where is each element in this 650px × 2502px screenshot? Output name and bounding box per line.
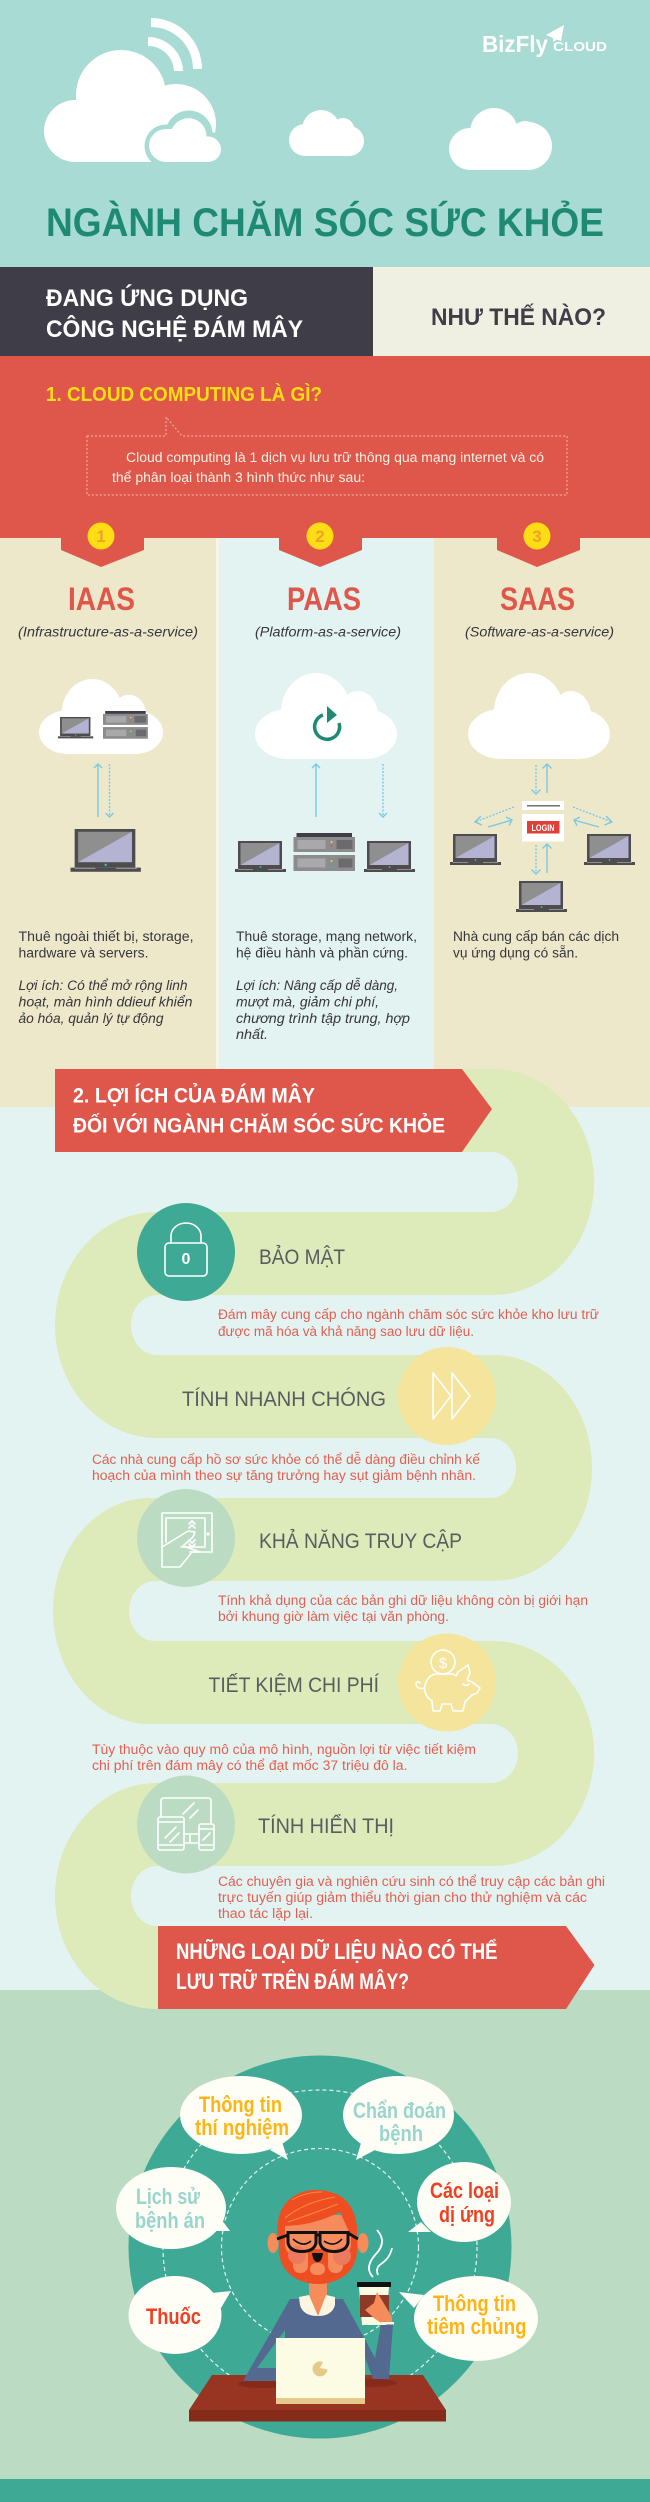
text: PAAS description: [236, 929, 417, 1042]
bubble: medical history: Lịch sử: [136, 2184, 200, 2209]
icon: laptop left: [235, 841, 286, 872]
text: cost saving description: Tùy thuộc vào quy mô của mô hình, nguồn lợi từ việc tiết kiệm: [92, 1742, 476, 1757]
bubble: lab information: [180, 2076, 302, 2160]
text: speed description: hoạch của mình theo sự tăng trưởng hay sụt giảm bệnh nhân.: [92, 1468, 476, 1483]
bubble: allergies: Các loại: [430, 2178, 499, 2203]
benefit: cost saving: [92, 1634, 496, 1773]
icon: piggy bank: $: [439, 1655, 448, 1672]
label: visibility: TÍNH HIỂN THỊ: [258, 1815, 394, 1838]
logo: BizFly Cloud: BizFly: [482, 31, 548, 57]
title: NGÀNH CHĂM SÓC SỨC KHỎE: [46, 199, 604, 245]
panel: PAAS: [235, 581, 417, 1042]
icon: hand on tablet: [137, 1489, 235, 1587]
text: speed description: Các nhà cung cấp hồ sơ sức khỏe có thể dễ dàng điều chỉnh kế: [92, 1452, 480, 1467]
text: PAAS description: Thuê storage, mạng network,: [236, 929, 417, 944]
text: IAAS description: hoạt, màn hình ddieuf khiển: [18, 994, 192, 1010]
large cloud with wifi signal: [44, 18, 230, 170]
text: accessibility description: bởi khung giờ làm việc tại văn phòng.: [218, 1609, 449, 1624]
icon: lock: [137, 1203, 235, 1301]
right cloud: [449, 108, 552, 170]
icon: laptop left: [450, 834, 501, 865]
bubble: diagnosis: [343, 2076, 454, 2160]
text: cost saving description: chi phí trên đám mây có thể đạt mốc 37 triệu đô la.: [92, 1758, 408, 1773]
subtitle band dark: CÔNG NGHỆ ĐÁM MÂY: [46, 315, 303, 343]
logo: BizFly Cloud: [482, 25, 607, 57]
text: cost saving description: [92, 1742, 476, 1773]
heading: section 1: 1. CLOUD COMPUTING LÀ GÌ?: [46, 383, 322, 406]
panel: benefits background: [0, 1107, 650, 2105]
benefit: accessibility: [137, 1489, 588, 1624]
banner: data types heading: LƯU TRỮ TRÊN ĐÁM MÂY?: [176, 1969, 409, 1994]
text: SAAS description: vụ ứng dụng có sẵn.: [453, 946, 578, 960]
banner: section 2 heading: ĐỐI VỚI NGÀNH CHĂM SÓC SỨC KHỎE: [73, 1114, 445, 1138]
arrows: up and down: [312, 764, 387, 817]
subtitle band dark: ĐANG ỨNG DỤNG: [46, 284, 248, 312]
bubble: diagnosis: bệnh: [379, 2121, 423, 2146]
text: PAAS description: chương trình tập trung, hợp: [236, 1011, 411, 1026]
label: cost saving: TIẾT KIỆM CHI PHÍ: [208, 1674, 379, 1697]
text: security description: [218, 1307, 599, 1339]
panel: SAAS: [450, 581, 635, 960]
subtitle band dark: [0, 267, 373, 356]
text: visibility description: Các chuyên gia và nghiên cứu sinh có thể truy cập các bản ghi: [218, 1874, 605, 1889]
illustration: person with coffee and laptop: [189, 2190, 446, 2422]
bubble: medication: [128, 2276, 231, 2354]
text: visibility description: thao tác lặp lại.: [218, 1906, 313, 1921]
text: PAAS description: hệ điều hành và phần cứng.: [236, 946, 408, 960]
heading: IAAS: IAAS: [68, 581, 135, 617]
icon: laptop: [70, 829, 141, 872]
icon: laptop right: [364, 841, 415, 872]
text: visibility description: trực tuyến giúp giảm thiểu thời gian cho thử nghiệm và các: [218, 1890, 587, 1905]
bubble: medical history: bệnh án: [135, 2208, 205, 2233]
label: security: BẢO MẬT: [259, 1246, 345, 1269]
desk: [189, 2375, 446, 2422]
text: IAAS description: Thuê ngoài thiết bị, storage,: [18, 929, 194, 944]
header background: [0, 0, 650, 267]
icon: piggy bank: [398, 1634, 496, 1732]
text: IAAS description: ảo hóa, quản lý tự động: [18, 1011, 164, 1026]
banner: section 2 heading: [55, 1069, 492, 1152]
text: SAAS description: Nhà cung cấp bán các dịch: [453, 929, 619, 944]
small centre cloud: [289, 110, 364, 156]
number badge 2: [306, 522, 334, 550]
callout: cloud computing definition: [87, 417, 567, 495]
icon: cloud: [468, 673, 610, 759]
text: IAAS description: hardware và servers.: [18, 946, 148, 960]
icon: laptop right: [584, 834, 635, 865]
subtitle band light: NHƯ THẾ NÀO?: [431, 303, 606, 331]
illustration circle with dashed rings: [128, 2056, 512, 2438]
text: accessibility description: [218, 1593, 588, 1624]
label: accessibility: KHẢ NĂNG TRUY CẬP: [259, 1530, 462, 1553]
text: security description: được mã hóa và khả năng sao lưu dữ liệu.: [218, 1324, 474, 1339]
bubble: vaccination: tiêm chủng: [427, 2314, 526, 2339]
winding green road: [53, 1069, 594, 2009]
text: IAAS description: [18, 929, 194, 1026]
bubble: allergies: [408, 2162, 511, 2242]
bubble: medication: Thuốc: [146, 2304, 201, 2329]
text: SAAS description: [453, 929, 619, 960]
benefit: visibility: [137, 1776, 605, 1921]
bubble: allergies: dị ứng: [439, 2202, 495, 2227]
banner: section 2 heading: 2. LỢI ÍCH CỦA ĐÁM MÂY: [73, 1084, 315, 1108]
text: PAAS description: Lợi ích: Nâng cấp dễ dàng,: [236, 978, 398, 993]
icon: devices: [137, 1776, 235, 1874]
callout: cloud computing definition: thể phân loại thành 3 hình thức như sau:: [112, 470, 365, 485]
subtitle: SAAS: (Software-as-a-service): [465, 624, 614, 640]
text: PAAS description: mượt mà, giảm chi phí,: [236, 994, 379, 1010]
logo: BizFly Cloud: CLOUD: [553, 39, 607, 54]
text: visibility description: [218, 1874, 605, 1921]
panel: columns background: [0, 538, 650, 1107]
icon: login box: LOGIN: [532, 823, 554, 833]
bubble: vaccination: [399, 2276, 538, 2361]
footer bar: [0, 2479, 650, 2502]
number badge 1: [88, 522, 114, 550]
icon: fast forward: [398, 1347, 496, 1445]
text: security description: Đám mây cung cấp cho ngành chăm sóc sức khỏe kho lưu trữ: [218, 1307, 599, 1322]
banner: data types heading: [158, 1926, 594, 2009]
icon: server: [294, 833, 355, 871]
text: PAAS description: nhất.: [236, 1027, 268, 1042]
icon: laptop bottom: [516, 881, 567, 912]
heading: SAAS: SAAS: [500, 581, 575, 617]
bubble: lab information: Thông tin: [199, 2092, 282, 2117]
coffee cup with steam: [357, 2230, 394, 2325]
panel: IAAS: [18, 581, 198, 1026]
icon: cloud with refresh arrow: [255, 673, 397, 759]
laptop: [276, 2338, 365, 2404]
panel: section 1 red band: [0, 356, 650, 567]
subtitle band light: [373, 267, 650, 356]
subtitle: PAAS: (Platform-as-a-service): [255, 624, 401, 640]
icon: cloud with laptop and server: [39, 679, 163, 754]
arrows: up and down: [94, 764, 114, 817]
person body: [243, 2280, 393, 2381]
callout: cloud computing definition: Cloud computing là 1 dịch vụ lưu trữ thông qua mạng internet và có: [126, 450, 544, 465]
subtitle: IAAS: (Infrastructure-as-a-service): [18, 624, 198, 640]
number badge 3: [524, 522, 550, 550]
text: accessibility description: Tính khả dụng của các bản ghi dữ liệu không còn bị giới hạn: [218, 1593, 588, 1608]
banner: data types heading: NHỮNG LOẠI DỮ LIỆU NÀO CÓ THỂ: [176, 1939, 498, 1964]
bubble: medical history: [116, 2167, 230, 2249]
bubble: diagnosis: Chẩn đoán: [353, 2098, 446, 2123]
number badge 3: 3: [532, 527, 542, 546]
heading: PAAS: PAAS: [287, 581, 361, 617]
benefit: speed: [92, 1347, 496, 1483]
arrows: login network: [475, 764, 612, 874]
person head: [268, 2190, 368, 2284]
text: speed description: [92, 1452, 480, 1483]
bubble: vaccination: Thông tin: [433, 2291, 516, 2316]
bubble: lab information: thí nghiệm: [195, 2115, 289, 2140]
number badge 2: 2: [315, 527, 325, 546]
number badge 1: 1: [96, 527, 106, 546]
text: IAAS description: Lợi ích: Có thể mở rộng linh: [18, 978, 188, 993]
label: speed: TÍNH NHANH CHÓNG: [182, 1388, 386, 1411]
panel: lower green background: [0, 1990, 650, 2479]
icon: lock: 0: [182, 1251, 191, 1268]
benefit: security: [137, 1203, 599, 1339]
icon: login box: [522, 801, 564, 842]
